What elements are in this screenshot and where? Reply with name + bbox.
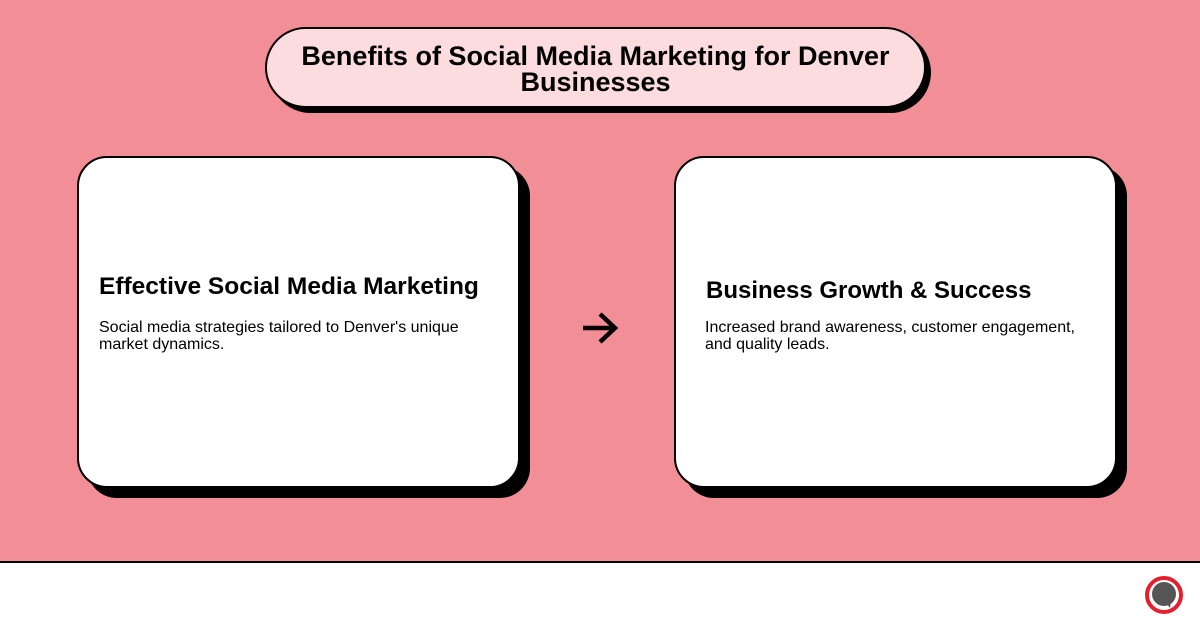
panel: effective social media marketing <box>77 156 520 488</box>
title: Businesses <box>520 67 671 97</box>
title <box>265 27 926 108</box>
text: right: Increased brand awareness, customer engagement, and quality leads. <box>705 319 1075 353</box>
panel: business growth <box>674 156 1117 488</box>
arrow <box>583 312 618 344</box>
heading: right: Business Growth & Success <box>706 277 1031 304</box>
heading: left: Effective Social Media Marketing <box>99 273 479 300</box>
title: Benefits of Social Media Marketing for Denver <box>301 41 890 71</box>
icon: logo <box>1145 576 1183 614</box>
text: left: Social media strategies tailored to Denver's unique market dynamics. <box>99 319 459 353</box>
